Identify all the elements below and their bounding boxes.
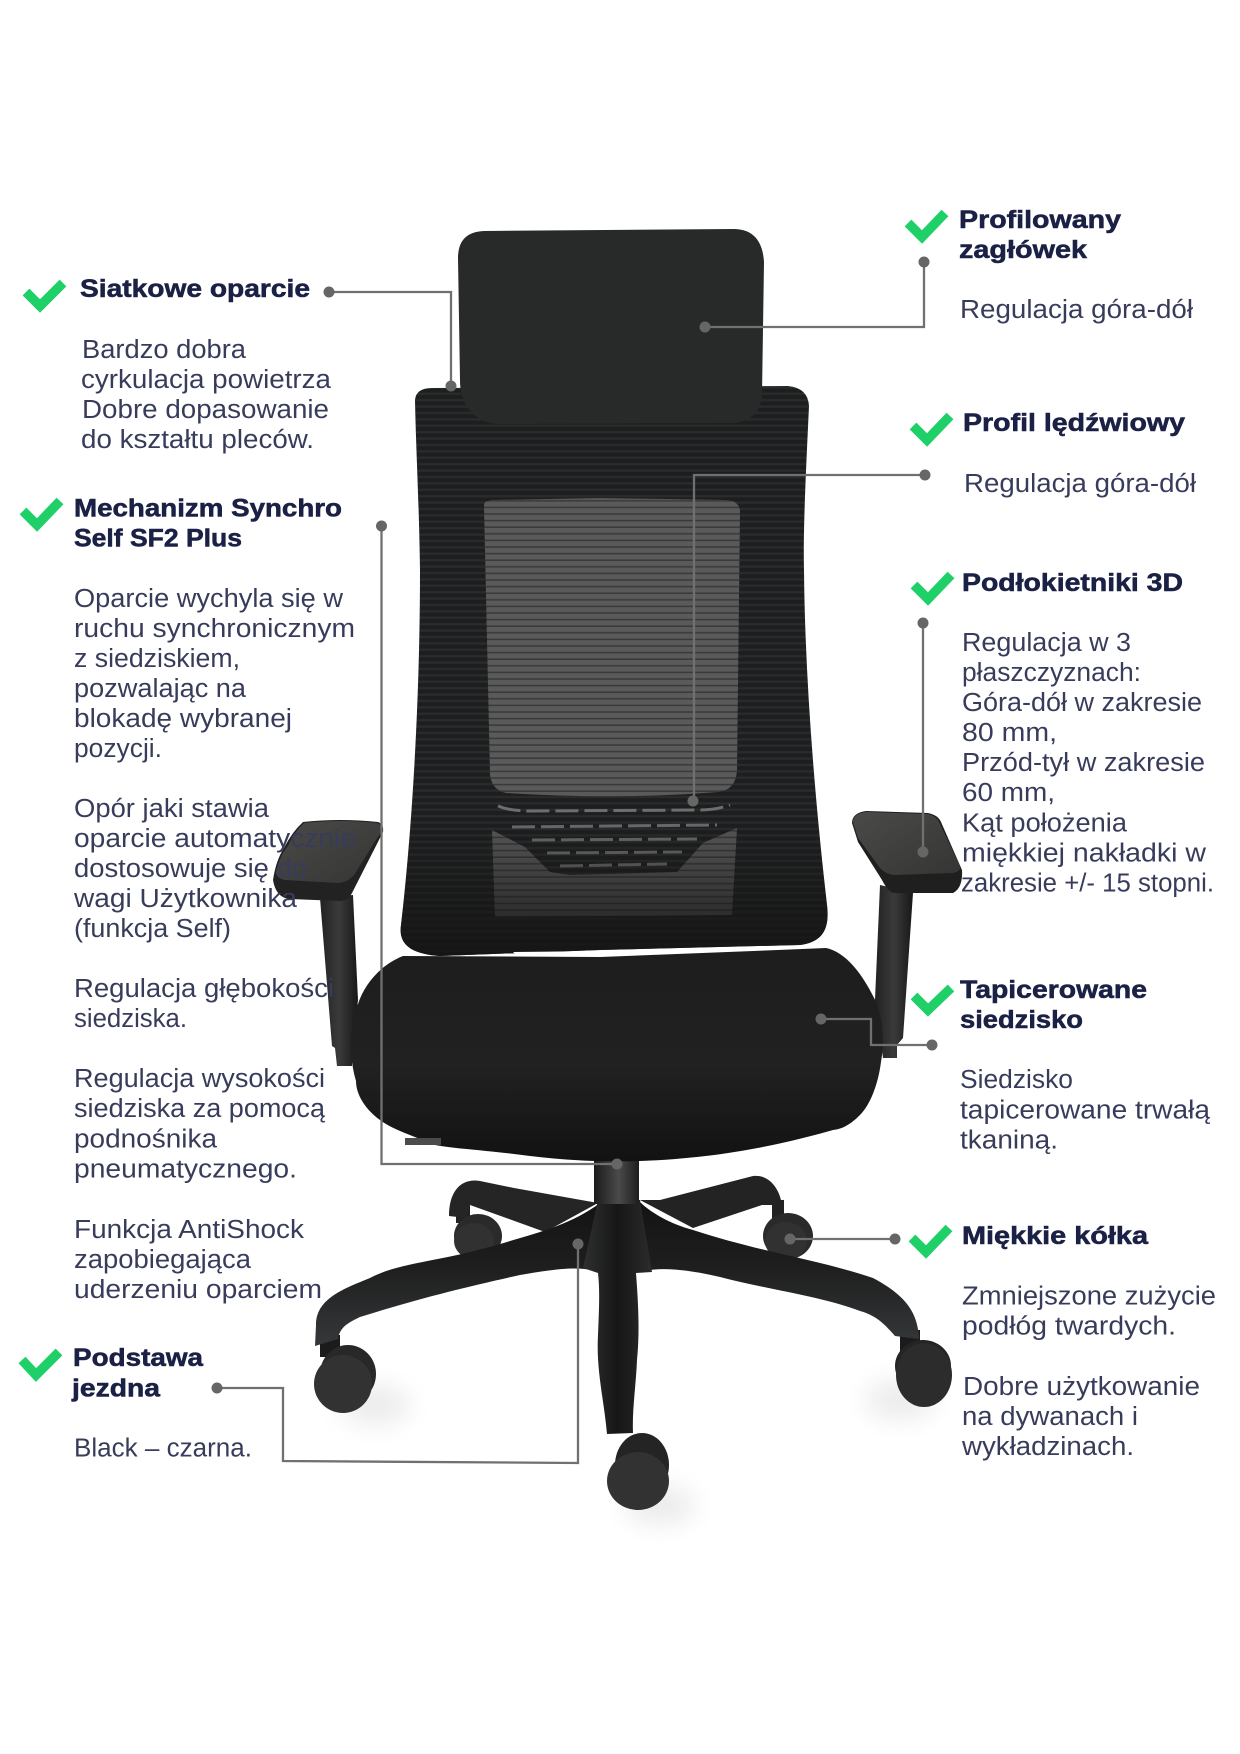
body text: zapobiegająca [74, 1246, 252, 1274]
body text: uderzeniu oparciem [74, 1276, 322, 1304]
leader line: armrests [918, 618, 928, 858]
leader line: seat [816, 1014, 938, 1050]
icon: check [914, 988, 951, 1010]
body text: do kształtu pleców. [81, 426, 314, 454]
body text: podnośnika [74, 1126, 218, 1154]
body text: zakresie +/- 15 stopni. [961, 870, 1214, 898]
body text [960, 1066, 1211, 1154]
body text: ruchu synchronicznym [74, 615, 355, 643]
body text: podłóg twardych. [962, 1312, 1176, 1340]
body text: wykładzinach. [961, 1433, 1134, 1461]
lumbar support slots [498, 805, 730, 866]
body text: Regulacja głębokości [74, 975, 334, 1003]
body text: Black – czarna. [74, 1434, 252, 1462]
heading: siedzisko [960, 1006, 1083, 1034]
body text: Opór jaki stawia [74, 795, 270, 823]
icon: check [26, 283, 63, 306]
office chair photo [273, 229, 962, 1525]
feature: Tapicerowane siedzisko [914, 976, 1211, 1154]
leader line: mesh backrest [324, 286, 456, 392]
seat cushion [351, 948, 883, 1161]
front caster [607, 1433, 669, 1510]
body text [961, 629, 1214, 898]
heading: Miękkie kółka [962, 1222, 1149, 1250]
body text: Regulacja w 3 [962, 629, 1131, 657]
body text: miękkiej nakładki w [962, 840, 1207, 868]
leader line: lumbar [688, 470, 930, 806]
body text: 80 mm, [962, 719, 1057, 747]
body text: oparcie automatycznie [74, 825, 356, 853]
body text: Oparcie wychyla się w [74, 585, 344, 613]
body text: Góra-dół w zakresie [962, 689, 1202, 717]
body text: Kąt położenia [962, 810, 1128, 838]
feature: Mechanizm Synchro [23, 494, 356, 1304]
heading [960, 976, 1147, 1034]
body text: Siedzisko [960, 1066, 1073, 1094]
rear base legs [449, 1176, 782, 1232]
body text [73, 585, 356, 1304]
heading: zagłówek [959, 236, 1087, 264]
gap between backrest and seat [513, 950, 716, 958]
body text: Funkcja AntiShock [74, 1216, 304, 1244]
body text [961, 1282, 1216, 1461]
body text: siedziska za pomocą [74, 1095, 326, 1123]
body text: Regulacja wysokości [74, 1065, 325, 1093]
heading: Profilowany [959, 206, 1121, 234]
heading: Tapicerowane [960, 976, 1147, 1004]
left armrest [273, 820, 383, 1066]
backrest frame [401, 386, 828, 956]
leader line: headrest [700, 256, 930, 332]
backrest lower shading [401, 386, 828, 956]
body text: Bardzo dobra [82, 336, 247, 364]
leader line: base [212, 1238, 584, 1463]
heading: Self SF2 Plus [74, 524, 242, 552]
body text: wagi Użytkownika [73, 885, 298, 913]
heading: Mechanizm Synchro [74, 494, 342, 522]
body text: siedziska. [74, 1005, 187, 1033]
heading [74, 494, 342, 552]
right armrest [852, 811, 962, 1058]
feature: Podstawa jezdna [22, 1344, 252, 1462]
icon: check [913, 416, 950, 440]
body text: 60 mm, [962, 779, 1055, 807]
heading: jezdna [71, 1374, 161, 1402]
heading [959, 206, 1121, 264]
body text: (funkcja Self) [74, 915, 231, 943]
body text: dostosowuje się do [74, 855, 307, 883]
body text: Regulacja góra-dół [960, 296, 1193, 324]
body text: Dobre dopasowanie [82, 396, 329, 424]
feature: Siatkowe oparcie [26, 275, 332, 454]
feature: Profilowany zagłówek [908, 206, 1193, 324]
body text: tapicerowane trwałą [960, 1096, 1211, 1124]
body text [81, 336, 332, 454]
front right caster [895, 1330, 952, 1407]
caster shadows [340, 1380, 935, 1525]
body text: tkaniną. [960, 1126, 1058, 1154]
front left caster [314, 1335, 376, 1413]
small rear caster left [454, 1205, 502, 1259]
icon: check [22, 1352, 59, 1375]
icon: check [908, 213, 945, 237]
body text: na dywanach i [962, 1403, 1138, 1431]
leader line: casters [784, 1234, 900, 1244]
body text: Dobre użytkowanie [963, 1373, 1200, 1401]
icon: check [912, 1228, 949, 1252]
gas lift column [594, 1150, 639, 1204]
heading: Podłokietniki 3D [962, 569, 1183, 597]
feature: Profil lędźwiowy [913, 409, 1196, 498]
icon: check [914, 575, 951, 599]
heading: Profil lędźwiowy [963, 409, 1185, 437]
body text: pozwalając na [74, 675, 247, 703]
small rear caster right [763, 1200, 813, 1260]
body text: z siedziskiem, [74, 645, 240, 673]
heading: Podstawa [73, 1344, 204, 1372]
feature: Miękkie kółka [912, 1222, 1216, 1461]
body text: Zmniejszone zużycie [962, 1282, 1216, 1310]
seat lever [405, 1138, 441, 1145]
body text: płaszczyznach: [962, 659, 1141, 687]
body text: Regulacja góra-dół [964, 470, 1196, 498]
heading: Siatkowe oparcie [80, 275, 310, 303]
body text: pneumatycznego. [74, 1156, 297, 1184]
icon: check [23, 501, 60, 525]
front base legs [315, 1200, 919, 1434]
body text: Przód-tył w zakresie [962, 749, 1205, 777]
headrest [458, 229, 764, 424]
feature: Podłokietniki 3D [914, 569, 1214, 898]
heading [71, 1344, 204, 1402]
leader line: synchro mechanism [376, 520, 622, 1170]
body text: blokadę wybranej [74, 705, 292, 733]
backrest mesh lower panel [492, 828, 737, 917]
backrest mesh upper panel [484, 498, 740, 796]
body text: pozycji. [74, 735, 162, 763]
body text: cyrkulacja powietrza [81, 366, 332, 394]
